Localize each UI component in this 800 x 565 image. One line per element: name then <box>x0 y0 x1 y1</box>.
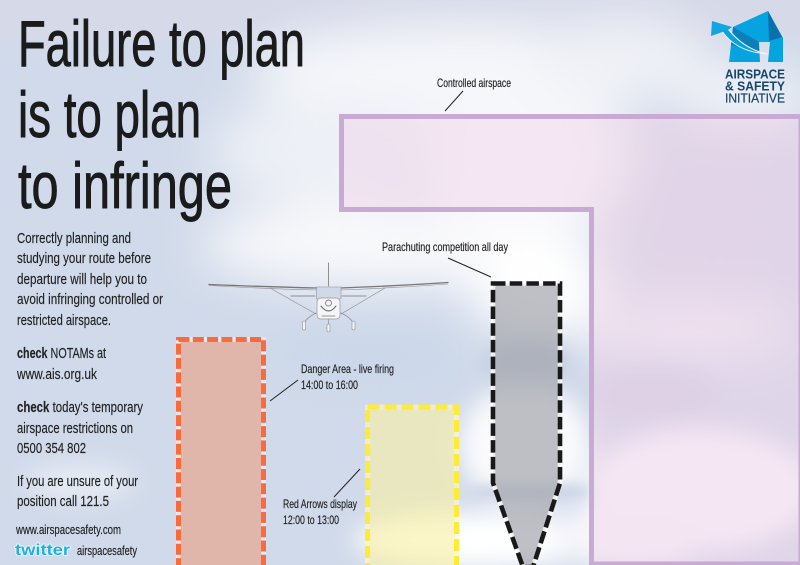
label: danger area <box>270 362 394 401</box>
twitter handle: twitter <box>15 542 70 559</box>
title <box>18 7 305 222</box>
logo wordmark: AIRSPACE <box>725 66 785 82</box>
twitter handle <box>15 542 138 559</box>
twitter handle: airspacesafety <box>77 544 138 558</box>
check NOTAMs text: check NOTAMs at <box>17 346 106 362</box>
check NOTAMs text: www.ais.org.uk <box>16 367 98 383</box>
label: controlled airspace <box>437 76 511 111</box>
label: parachuting competition <box>382 240 508 277</box>
label: red arrows display: Red Arrows display <box>283 497 357 511</box>
panel: red arrows display <box>368 407 456 565</box>
panel: parachuting competition <box>493 284 560 565</box>
intro text: studying your route before <box>17 251 151 267</box>
icon: logo building and arrow <box>711 11 783 62</box>
check restrictions text <box>17 400 144 457</box>
intro text <box>17 231 163 329</box>
position call text: If you are unsure of your <box>17 474 138 490</box>
check restrictions text: airspace restrictions on <box>17 421 133 437</box>
intro text: Correctly planning and <box>17 231 131 247</box>
title: Failure to plan <box>18 7 305 80</box>
label: danger area: 14:00 to 16:00 <box>301 378 358 392</box>
label: parachuting competition: Parachuting competition all day <box>382 240 508 254</box>
check restrictions text: 0500 354 802 <box>17 441 86 457</box>
intro text: restricted airspace. <box>17 313 111 329</box>
label: red arrows display: 12:00 to 13:00 <box>283 513 339 527</box>
website: www.airspacesafety.com <box>15 523 121 537</box>
title: to infringe <box>18 149 232 222</box>
intro text: avoid infringing controlled or <box>17 292 163 308</box>
panel: controlled airspace <box>342 116 800 564</box>
title: is to plan <box>18 78 201 151</box>
logo wordmark <box>725 66 785 106</box>
logo: Airspace & Safety Initiative <box>711 11 785 106</box>
check restrictions text: check today's temporary <box>17 400 144 416</box>
label: danger area: Danger Area - live firing <box>301 362 394 376</box>
intro text: departure will help you to <box>17 272 147 288</box>
logo wordmark: & SAFETY <box>725 78 785 94</box>
icon: light aircraft front view <box>209 263 448 332</box>
label: red arrows display <box>283 469 360 527</box>
position call text <box>17 474 138 510</box>
logo wordmark: INITIATIVE <box>725 90 785 106</box>
position call text: position call 121.5 <box>17 494 109 510</box>
check NOTAMs text <box>16 346 106 383</box>
panel: danger area <box>178 340 264 565</box>
label: controlled airspace: Controlled airspace <box>437 76 511 90</box>
